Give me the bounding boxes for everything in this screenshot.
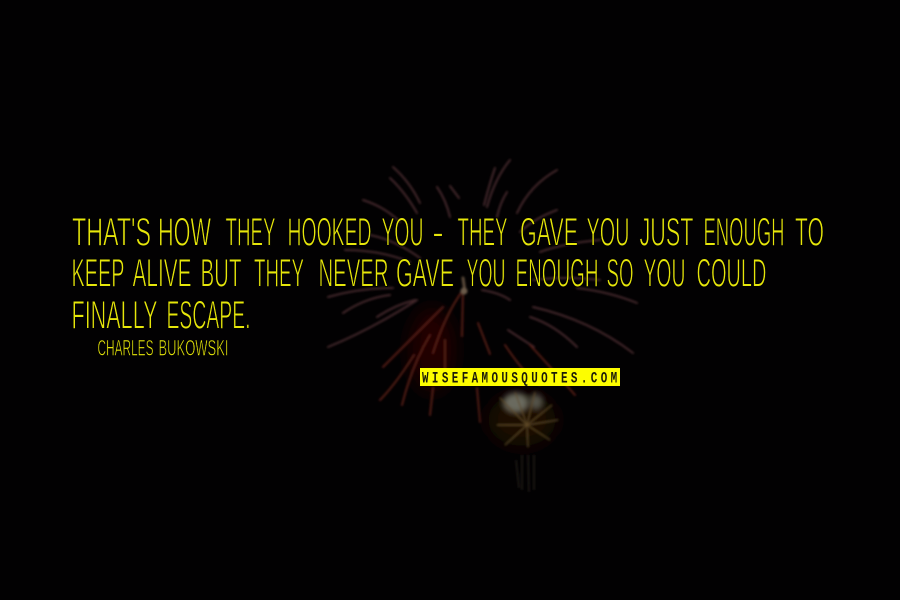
quote line 1: THAT'S: [72, 210, 151, 254]
quote line 2: THEY: [254, 251, 304, 295]
quote line 1: JUST: [640, 210, 694, 254]
author: BUKOWSKI: [158, 335, 228, 360]
quote line 1: TO: [795, 210, 824, 254]
quote line 2: [72, 251, 766, 295]
quote line 1: ENOUGH: [704, 210, 784, 254]
quote line 3: FINALLY: [72, 293, 158, 337]
quote line 2: BUT: [200, 251, 242, 295]
quote line 1: THEY: [458, 210, 508, 254]
quote line 1: [72, 210, 824, 254]
image: large red firework burst: [328, 160, 637, 422]
quote line 2: ENOUGH: [516, 251, 598, 295]
quote line 2: ALIVE: [132, 251, 192, 295]
quote line 1: GAVE: [520, 210, 578, 254]
quote line 2: SO: [606, 251, 634, 295]
quote text: COULD: [696, 251, 766, 295]
author: CHARLES: [98, 335, 154, 360]
quote line 1: THEY: [226, 210, 276, 254]
quote line 2: KEEP: [72, 251, 124, 295]
quote line 1: YOU: [586, 210, 630, 254]
watermark badge: WISEFAMOUSQUOTES.COM: [422, 371, 617, 388]
quote text: [72, 210, 824, 337]
quote line 2: NEVER: [318, 251, 388, 295]
quote line 2: YOU: [644, 251, 686, 295]
quote line 1: YOU: [382, 210, 424, 254]
quote text: ESCAPE.: [166, 293, 250, 337]
quote line 1: HOW: [158, 210, 211, 254]
quote line 1: -: [432, 210, 444, 254]
quote line 2: GAVE: [396, 251, 454, 295]
quote line 2: YOU: [466, 251, 506, 295]
quote line 1: HOOKED: [288, 210, 372, 254]
image: small distant firework: [488, 392, 558, 492]
